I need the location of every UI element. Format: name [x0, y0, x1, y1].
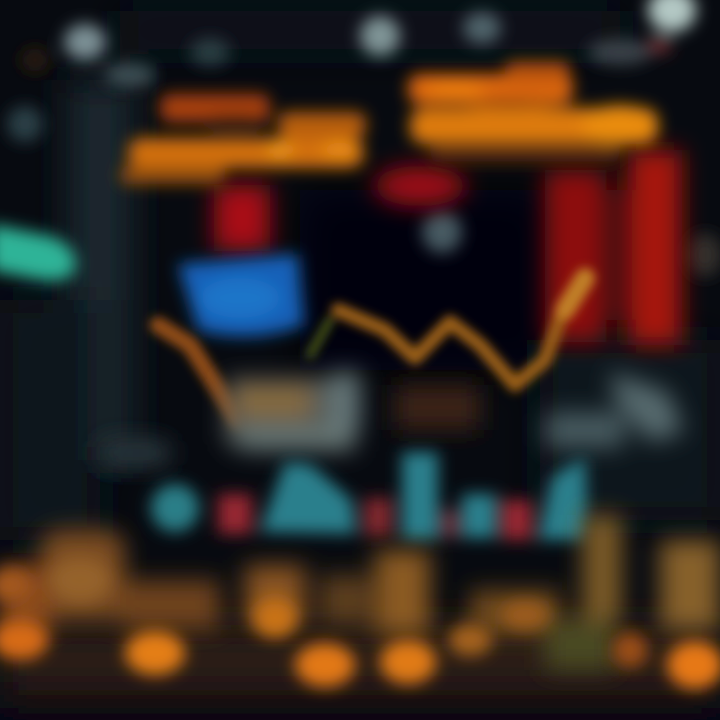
orange headline right [408, 62, 658, 162]
orange headline left [120, 94, 366, 184]
teal glowing bar [0, 224, 76, 281]
cart chart block [225, 372, 360, 450]
glowing coins [0, 558, 720, 689]
coin stacks [0, 515, 720, 670]
blue screen panel [178, 254, 304, 336]
dark orange data block [395, 385, 480, 430]
orange trend line [158, 278, 585, 420]
background light spots [7, 0, 720, 277]
bottom bar chart [151, 452, 588, 540]
red columns [214, 150, 682, 345]
grey diagonal shapes right [100, 372, 684, 466]
coin field [0, 515, 720, 689]
